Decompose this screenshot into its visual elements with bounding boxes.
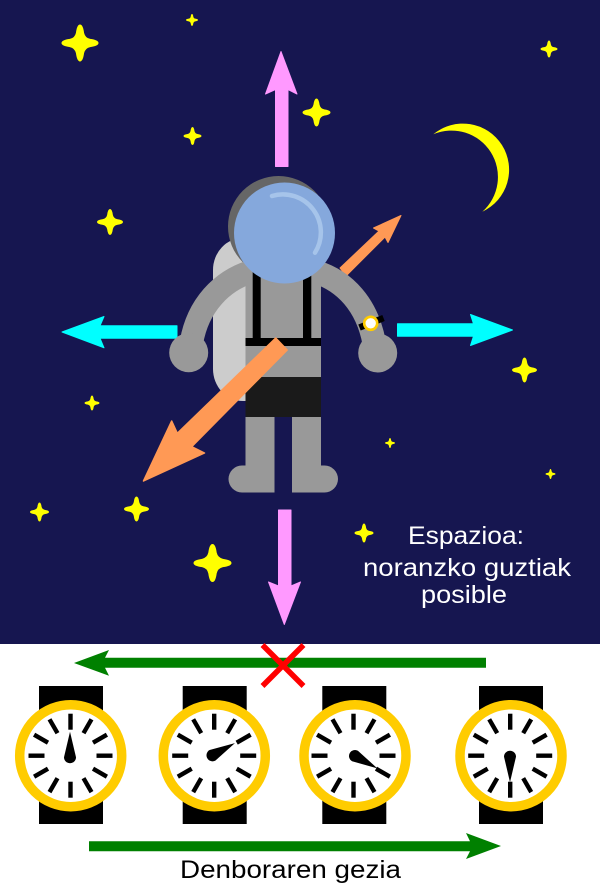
text: space caption: Espazioa: — [408, 522, 524, 550]
right hand — [358, 334, 397, 372]
clock 2 — [163, 686, 265, 824]
text: space caption: noranzko guztiak — [363, 554, 572, 582]
right leg — [292, 417, 338, 492]
stars — [30, 14, 558, 582]
text: arrow of time label: Denboraren gezia — [180, 856, 401, 884]
torso — [246, 262, 321, 377]
astronaut — [169, 176, 397, 492]
arrow: pink down — [268, 510, 300, 624]
left arm — [192, 272, 250, 342]
icon: red cross — [262, 645, 304, 686]
harness — [246, 270, 321, 346]
arrow: small orange up-right — [340, 216, 401, 276]
arrow: cyan right — [398, 314, 512, 346]
shorts — [246, 377, 321, 417]
arrow: green backward — [74, 650, 486, 676]
clock 3 — [304, 686, 406, 824]
left leg — [228, 417, 274, 492]
text: space caption: posible — [421, 581, 507, 609]
wrist watch — [360, 317, 384, 330]
clock 4 — [460, 686, 562, 824]
panel: night sky background — [0, 0, 600, 644]
text: space caption — [363, 522, 572, 609]
icon: crescent moon — [433, 124, 509, 212]
clock 1 — [20, 686, 122, 824]
backpack — [213, 238, 275, 401]
right arm — [316, 272, 374, 342]
arrow: pink up — [266, 52, 297, 166]
arrow: cyan left — [62, 316, 177, 348]
visor highlight — [272, 194, 321, 253]
helmet visor — [234, 182, 335, 284]
left hand — [169, 333, 208, 372]
helmet back — [228, 176, 329, 277]
arrow: green forward — [89, 833, 501, 859]
arrow: large orange down-left — [144, 338, 287, 481]
